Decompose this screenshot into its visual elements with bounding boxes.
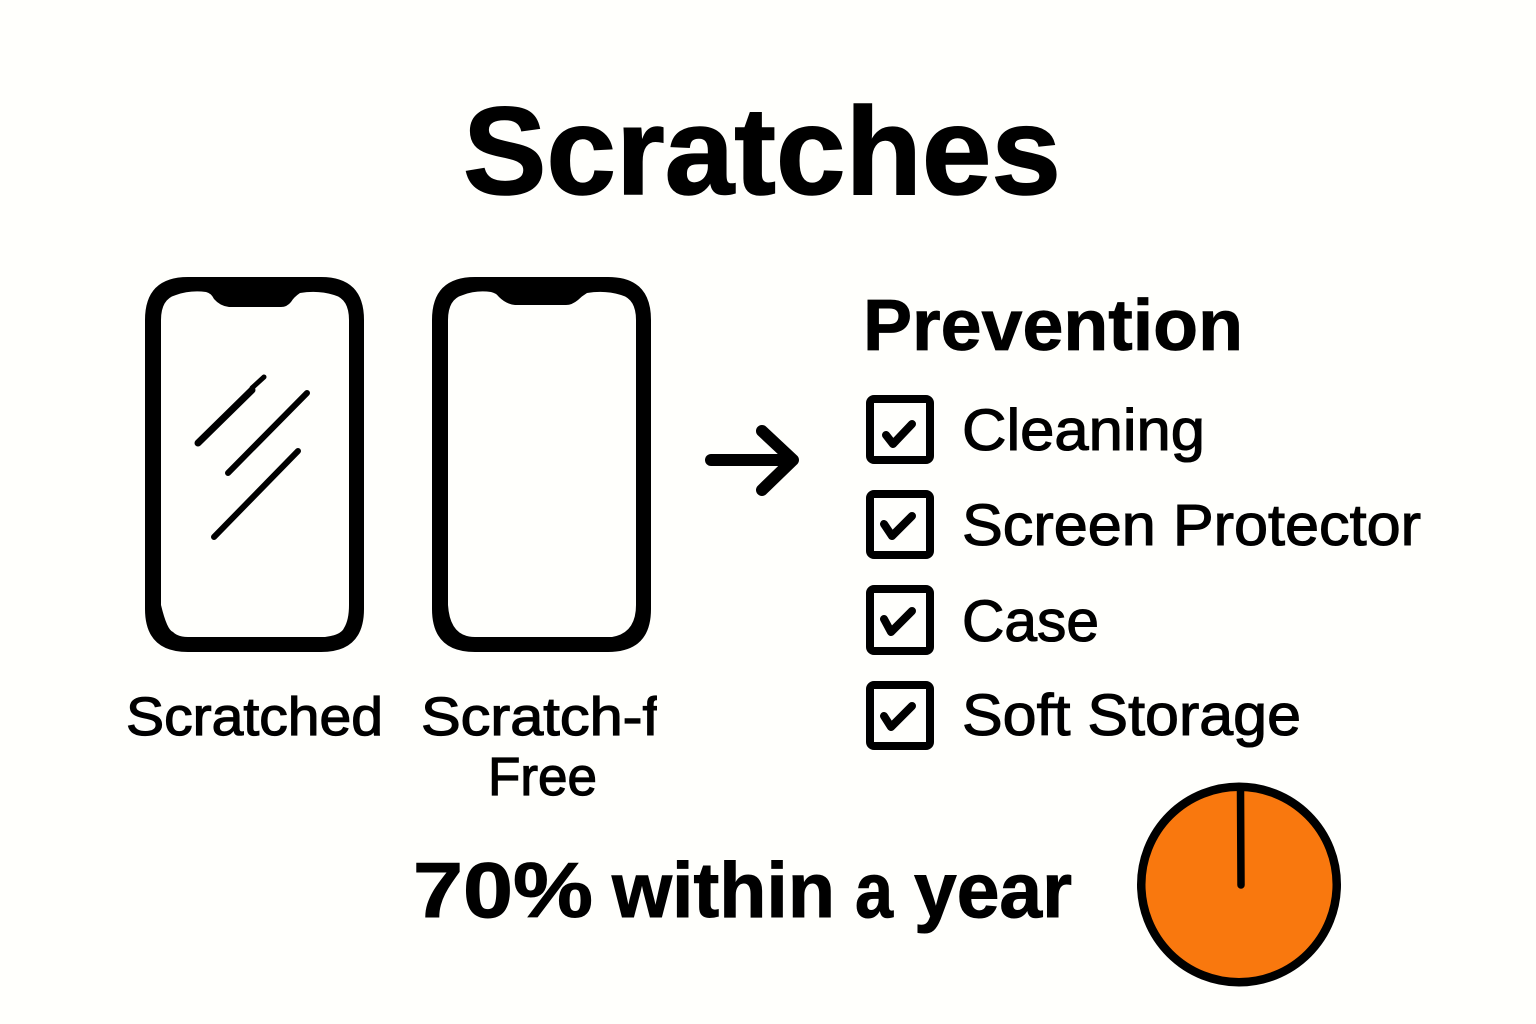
- checklist: [870, 398, 1421, 748]
- statistic text: within: [611, 846, 835, 934]
- icon: scratched phone: [145, 277, 364, 652]
- item: case: Case: [962, 589, 1099, 654]
- title: Scratches: [463, 83, 1061, 221]
- item: soft storage: Soft Storage: [962, 683, 1301, 748]
- statistic text: year: [914, 846, 1072, 934]
- icon: scratch-free phone: [432, 277, 651, 652]
- label: scratch-free: Scratch-f: [421, 687, 660, 747]
- pie chart: [1141, 787, 1337, 982]
- heading: prevention: Prevention: [863, 286, 1243, 366]
- scratch marks: [198, 377, 307, 537]
- statistic text: [413, 846, 1072, 934]
- item: screen protector: Screen Protector: [962, 493, 1421, 558]
- checkbox: case: [870, 589, 930, 651]
- checkbox: cleaning: [870, 399, 930, 460]
- statistic text: 70%: [413, 846, 593, 934]
- checkbox: screen protector: [870, 494, 930, 555]
- statistic text: a: [855, 846, 894, 934]
- item: cleaning: Cleaning: [962, 398, 1205, 463]
- label: scratched: Scratched: [126, 687, 383, 747]
- checkbox: soft storage: [870, 685, 930, 746]
- label: scratch-free: [422, 695, 657, 796]
- label: scratch-free: Free: [488, 747, 597, 807]
- arrow: [711, 431, 793, 490]
